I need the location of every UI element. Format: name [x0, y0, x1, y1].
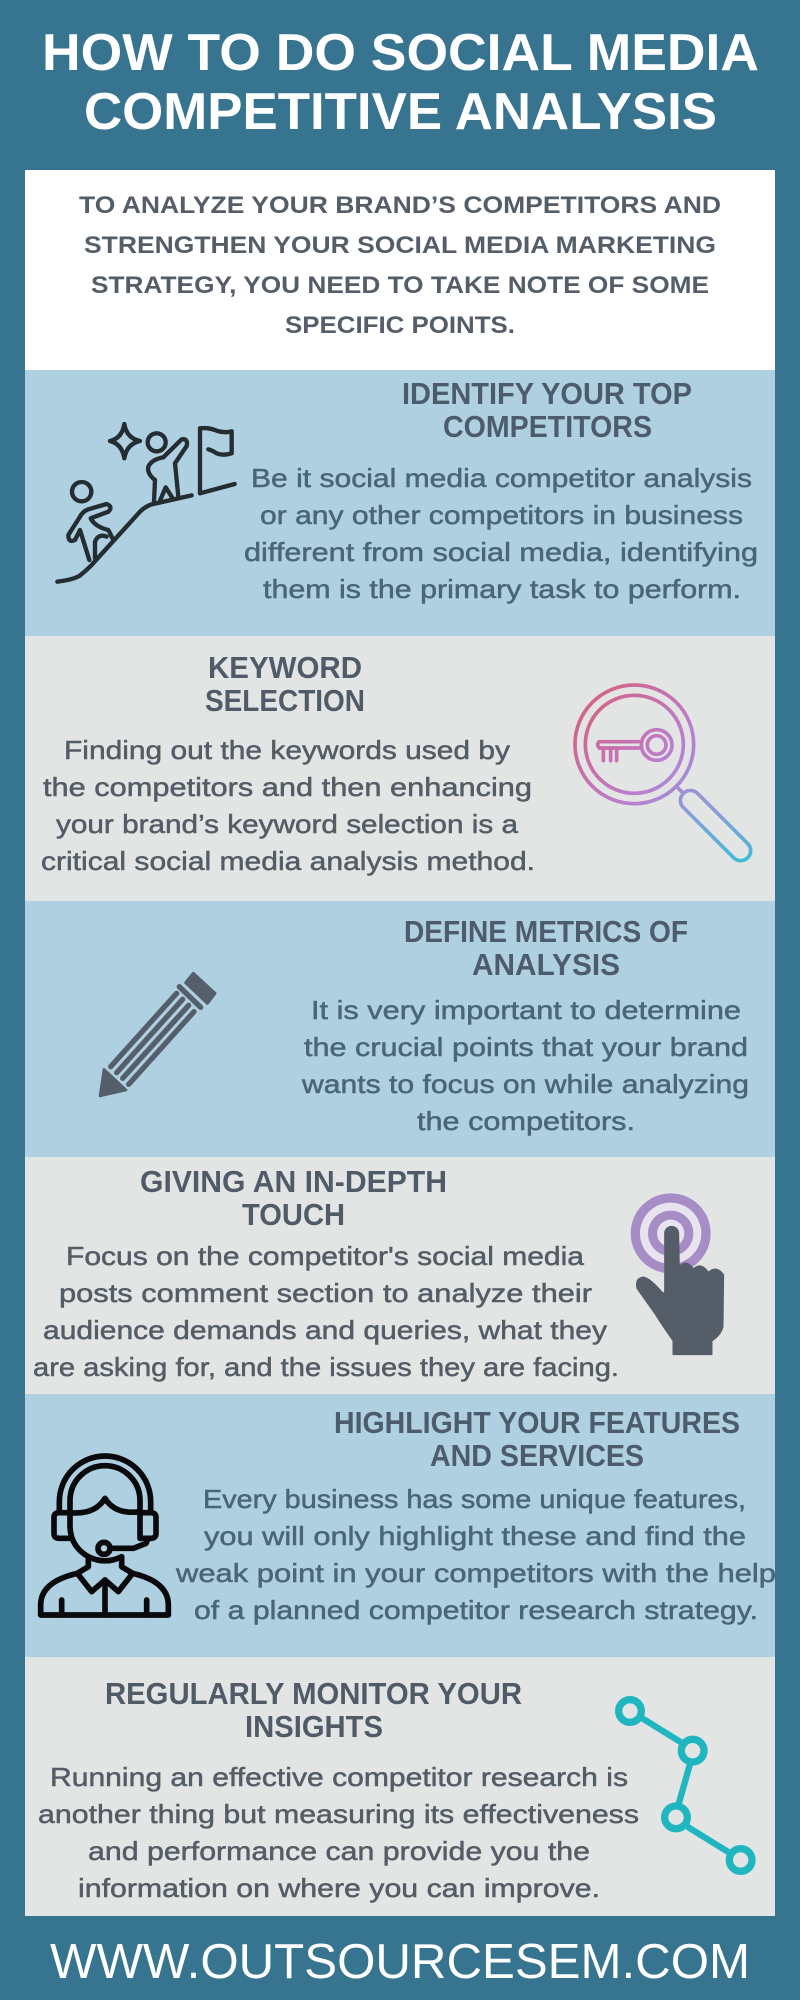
panel: keyword selection: [25, 636, 775, 901]
body text: [33, 1241, 619, 1382]
heading: KEYWORD: [208, 650, 362, 685]
body text: [38, 1762, 639, 1903]
body text: [41, 735, 535, 876]
heading: IDENTIFY YOUR TOP: [402, 376, 692, 411]
heading: SELECTION: [205, 683, 365, 718]
intro text: SPECIFIC POINTS.: [285, 312, 515, 339]
body text: [301, 995, 749, 1136]
icon: pencil: [100, 973, 215, 1096]
body text: another thing but measuring its effectiveness: [38, 1799, 639, 1829]
body text: It is very important to determine: [311, 995, 741, 1025]
body text: information on where you can improve.: [78, 1873, 600, 1903]
icon: support agent with headset: [41, 1456, 168, 1615]
heading: GIVING AN IN-DEPTH: [140, 1164, 447, 1199]
body text: [244, 463, 758, 604]
heading: REGULARLY MONITOR YOUR: [105, 1676, 522, 1711]
heading: [205, 650, 365, 718]
heading: [404, 914, 688, 982]
body text: different from social media, identifying: [244, 537, 758, 567]
body text: Running an effective competitor research is: [50, 1762, 628, 1792]
intro text: TO ANALYZE YOUR BRAND’S COMPETITORS AND: [79, 192, 721, 219]
body text: Be it social media competitor analysis: [251, 463, 752, 493]
body text: are asking for, and the issues they are facing.: [33, 1352, 619, 1382]
heading: DEFINE METRICS OF: [404, 914, 688, 949]
body text: and performance can provide you the: [88, 1836, 590, 1866]
body text: of a planned competitor research strategy.: [194, 1595, 758, 1625]
panel: define metrics of analysis: [25, 901, 775, 1157]
body text: [175, 1484, 776, 1625]
body text: Focus on the competitor's social media: [66, 1241, 585, 1271]
intro text: STRENGTHEN YOUR SOCIAL MEDIA MARKETING: [84, 232, 716, 259]
icon: connected nodes: [619, 1700, 752, 1871]
panel: introduction: [25, 170, 775, 370]
panel: identify your top competitors: [25, 370, 775, 636]
title: COMPETITIVE ANALYSIS: [84, 83, 717, 141]
heading: [105, 1676, 522, 1744]
body text: wants to focus on while analyzing: [301, 1069, 749, 1099]
heading: COMPETITORS: [443, 409, 652, 444]
body text: the competitors and then enhancing: [43, 772, 532, 802]
heading: HIGHLIGHT YOUR FEATURES: [334, 1405, 740, 1440]
heading: INSIGHTS: [245, 1709, 383, 1744]
icon: climbers with flag: [57, 424, 235, 582]
body text: the crucial points that your brand: [304, 1032, 748, 1062]
body text: your brand’s keyword selection is a: [56, 809, 519, 839]
body text: Finding out the keywords used by: [64, 735, 510, 765]
icon: finger tapping target: [631, 1193, 723, 1354]
panel: highlight your features and services: [25, 1394, 776, 1657]
body text: weak point in your competitors with the help: [175, 1558, 776, 1588]
body text: posts comment section to analyze their: [59, 1278, 592, 1308]
heading: ANALYSIS: [472, 947, 620, 982]
intro text: [79, 192, 721, 339]
icon: magnifier with key: [575, 685, 755, 865]
heading: [334, 1405, 740, 1473]
body text: Every business has some unique features,: [203, 1484, 746, 1514]
heading: AND SERVICES: [430, 1438, 644, 1473]
heading: TOUCH: [242, 1197, 345, 1232]
panel: giving an in-depth touch: [25, 1157, 775, 1394]
title: [42, 24, 759, 141]
panel: regularly monitor your insights: [25, 1657, 775, 1916]
footer: website url: WWW.OUTSOURCESEM.COM: [50, 1935, 750, 1989]
heading: [140, 1164, 447, 1232]
heading: [402, 376, 692, 444]
body text: audience demands and queries, what they: [43, 1315, 607, 1345]
body text: critical social media analysis method.: [41, 846, 535, 876]
title: HOW TO DO SOCIAL MEDIA: [42, 24, 759, 82]
body text: the competitors.: [417, 1106, 635, 1136]
body text: or any other competitors in business: [260, 500, 743, 530]
body text: them is the primary task to perform.: [263, 574, 741, 604]
intro text: STRATEGY, YOU NEED TO TAKE NOTE OF SOME: [91, 272, 709, 299]
body text: you will only highlight these and find the: [204, 1521, 746, 1551]
